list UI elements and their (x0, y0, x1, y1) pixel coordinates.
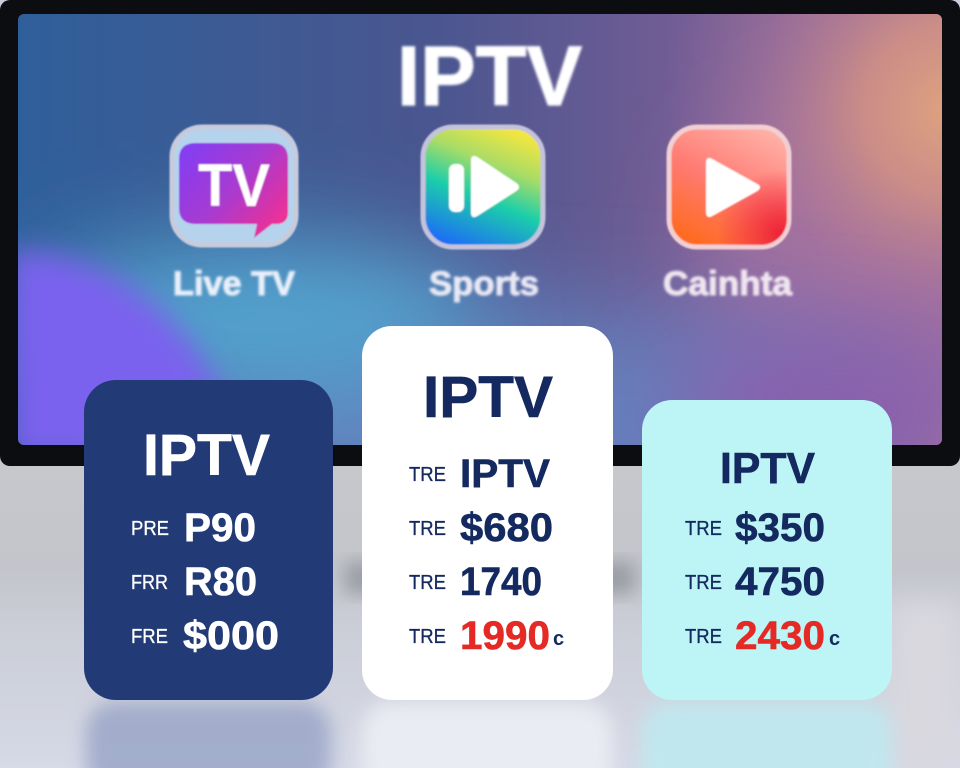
row 2: 4750 (735, 560, 825, 604)
row 1 (131, 506, 256, 550)
tv monitor (0, 0, 960, 466)
row 3: c (829, 628, 840, 650)
icon: live tv (172, 127, 296, 245)
reflections on the table (86, 702, 892, 768)
row 3: FRE (131, 626, 168, 648)
label: live tv: Live TV (173, 265, 295, 303)
row 3: $000 (183, 614, 279, 658)
row 3: 1740 (460, 560, 542, 604)
heading: IPTV (720, 444, 816, 493)
row 2 (409, 506, 553, 550)
panel: navy plan (84, 380, 333, 700)
row 3: 2430 (735, 614, 825, 658)
row 2: FRR (131, 572, 168, 594)
row 2 (131, 560, 257, 604)
row 2: TRE (409, 518, 446, 540)
row 1: P90 (184, 506, 256, 550)
row 3 (131, 614, 279, 658)
tv floor background (0, 460, 960, 768)
screen title: IPTV (397, 29, 582, 123)
row 3 (409, 560, 542, 604)
row 2: R80 (184, 560, 257, 604)
row 4 (409, 614, 564, 658)
label: cainhta: Cainhta (663, 265, 793, 303)
row 4: c (553, 628, 564, 650)
row 1: $350 (735, 506, 825, 550)
row 1 (409, 452, 550, 496)
row 1 (685, 506, 825, 550)
row 1: PRE (131, 518, 169, 540)
icon: sports (423, 127, 543, 247)
row 3: TRE (409, 572, 446, 594)
tv screen gradient (18, 14, 942, 445)
row 3 (685, 614, 840, 658)
panel: white plan (362, 326, 613, 700)
icon: live tv: TV (198, 152, 270, 219)
heading: IPTV (423, 365, 553, 430)
row 4: TRE (409, 626, 446, 648)
row 4: 1990 (460, 614, 550, 658)
row 1: TRE (685, 518, 722, 540)
panel: aqua plan (642, 400, 892, 700)
label: sports: Sports (429, 265, 539, 303)
row 1: IPTV (460, 452, 550, 496)
row 2: $680 (460, 506, 553, 550)
row 3: TRE (685, 626, 722, 648)
heading: IPTV (143, 423, 270, 488)
row 1: TRE (409, 464, 446, 486)
row 2: TRE (685, 572, 722, 594)
icon: play (669, 127, 789, 247)
row 2 (685, 560, 825, 604)
